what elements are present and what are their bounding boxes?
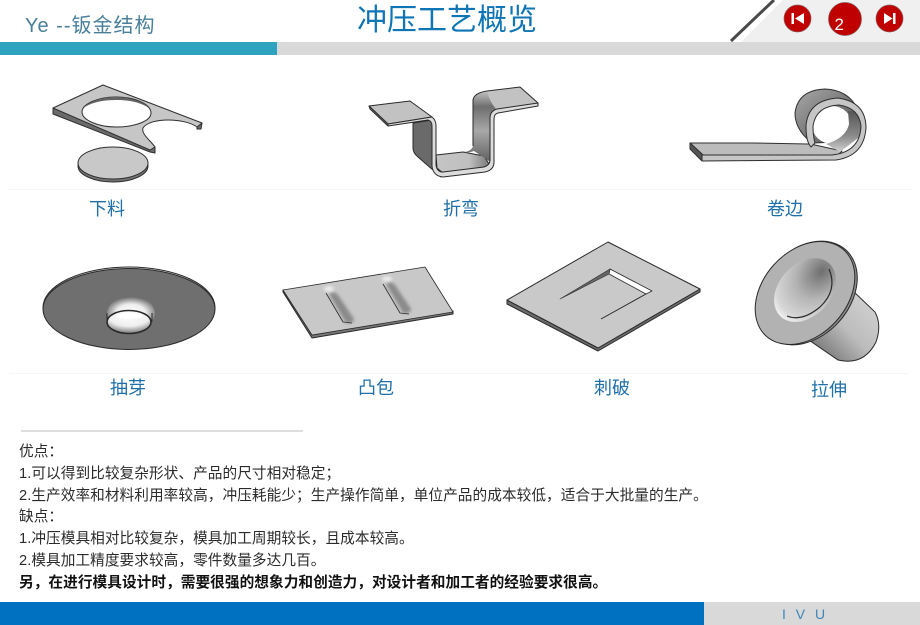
- drawn recess: [762, 246, 848, 334]
- emboss left: [324, 286, 354, 323]
- curl interior: [812, 106, 852, 144]
- illustration: lanced plate: [507, 242, 700, 351]
- label: flanged hole: 抽芽: [110, 378, 146, 398]
- footer bar: [0, 602, 920, 625]
- lanced window slot: [609, 269, 652, 294]
- label: lancing: 刺破: [594, 378, 630, 398]
- plate face: [507, 242, 700, 348]
- hole opening: [107, 310, 151, 334]
- plate face: [283, 267, 453, 335]
- footer blue segment: [0, 602, 704, 625]
- disc rim: [43, 267, 215, 348]
- hole inner wall: [85, 97, 149, 108]
- strip top face: [690, 143, 842, 155]
- title: 冲压工艺概览: [357, 4, 537, 37]
- disadvantage 2: 2.模具加工精度要求较高，零件数量多达几百。: [19, 553, 325, 569]
- label: hemming: 卷边: [767, 199, 803, 219]
- illustration: hemming part: [690, 89, 866, 161]
- illustration: blanking part: [53, 85, 202, 182]
- divider: first row: [8, 188, 912, 190]
- right wall: [465, 91, 497, 163]
- icon: previous button: [784, 5, 811, 32]
- icon: page number button: [828, 2, 862, 36]
- divider: second row: [10, 372, 910, 374]
- sheet edge profile: [388, 103, 538, 177]
- plate edge: [283, 290, 453, 338]
- illustration: deep drawn part: [735, 221, 879, 365]
- bold note: 另，在进行模具设计时，需要很强的想象力和创造力，对设计者和加工者的经验要求很高。: [19, 575, 607, 591]
- text block: advantages and disadvantages: [19, 443, 708, 591]
- header bar: [0, 42, 920, 55]
- advantage 2: 2.生产效率和材料利用率较高，冲压耗能少；生产操作简单，单位产品的成本较低，适合于大批量的生产。: [19, 488, 708, 504]
- illustration: embossed plate: [283, 267, 453, 338]
- plate edge: [507, 289, 700, 351]
- curled edge: [702, 98, 866, 161]
- drawn cylinder body: [806, 290, 879, 361]
- illustration: flanged hole: [43, 267, 215, 350]
- illustration: bending part: [369, 87, 538, 177]
- label: embossing: 凸包: [358, 378, 394, 398]
- left wall: [413, 120, 441, 177]
- emboss right: [382, 276, 411, 314]
- divider: text block: [21, 430, 303, 432]
- disadvantages heading: 缺点：: [19, 509, 63, 525]
- icon: next button: [876, 5, 903, 32]
- advantage 1: 1.可以得到比较复杂形状、产品的尺寸相对稳定；: [19, 466, 340, 482]
- header navigation corner: [731, 0, 920, 42]
- disadvantage 1: 1.冲压模具相对比较复杂，模具加工周期较长，且成本较高。: [19, 531, 414, 547]
- flange face: [735, 222, 875, 364]
- footer text: I V U: [782, 606, 825, 622]
- lance cut right: [601, 294, 646, 319]
- plate thickness: [53, 108, 202, 153]
- curl rear: [795, 89, 857, 143]
- plate top face: [53, 85, 202, 150]
- strip end: [690, 143, 703, 161]
- floor: [436, 152, 491, 174]
- label: blanking: 下料: [89, 199, 125, 219]
- right flange: [487, 87, 538, 110]
- label: bending: 折弯: [443, 199, 479, 219]
- left flange: [369, 101, 432, 124]
- label: deep drawing: 拉伸: [811, 380, 847, 400]
- flange rear rim: [736, 221, 878, 365]
- section label: Ye --钣金结构: [25, 15, 156, 37]
- disc face: [43, 268, 215, 350]
- icon: page number button: 2: [834, 15, 844, 34]
- header teal progress segment: [0, 42, 277, 55]
- advantages heading: 优点：: [19, 444, 63, 460]
- lance cut left: [560, 269, 610, 299]
- raised collar: [107, 297, 155, 326]
- blank disc: [78, 150, 148, 182]
